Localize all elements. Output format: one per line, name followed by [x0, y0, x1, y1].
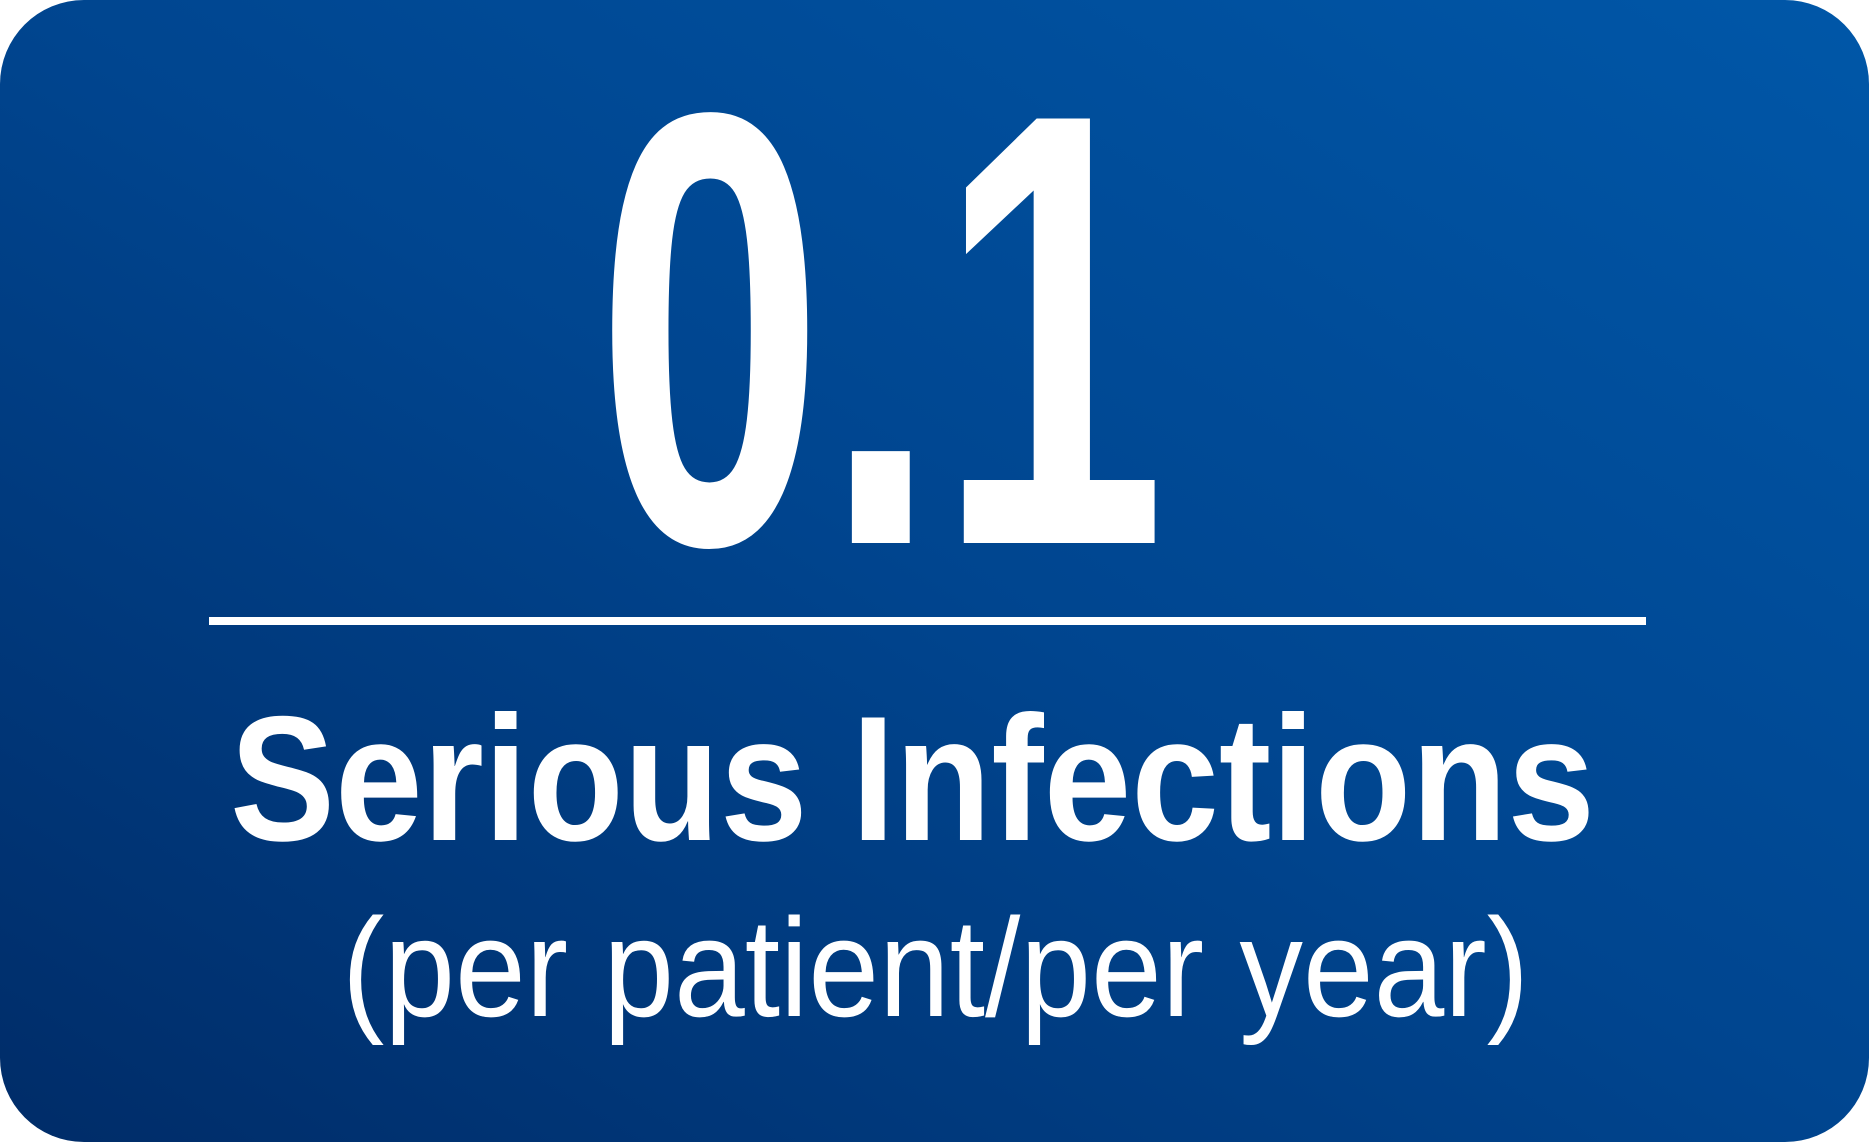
big number: 0.1: [596, 0, 1166, 674]
heading: Serious Infections: Serious Infections: [230, 679, 1595, 878]
divider line: [209, 617, 1646, 625]
subheading: per patient per year: (per patient/per year): [342, 889, 1529, 1046]
